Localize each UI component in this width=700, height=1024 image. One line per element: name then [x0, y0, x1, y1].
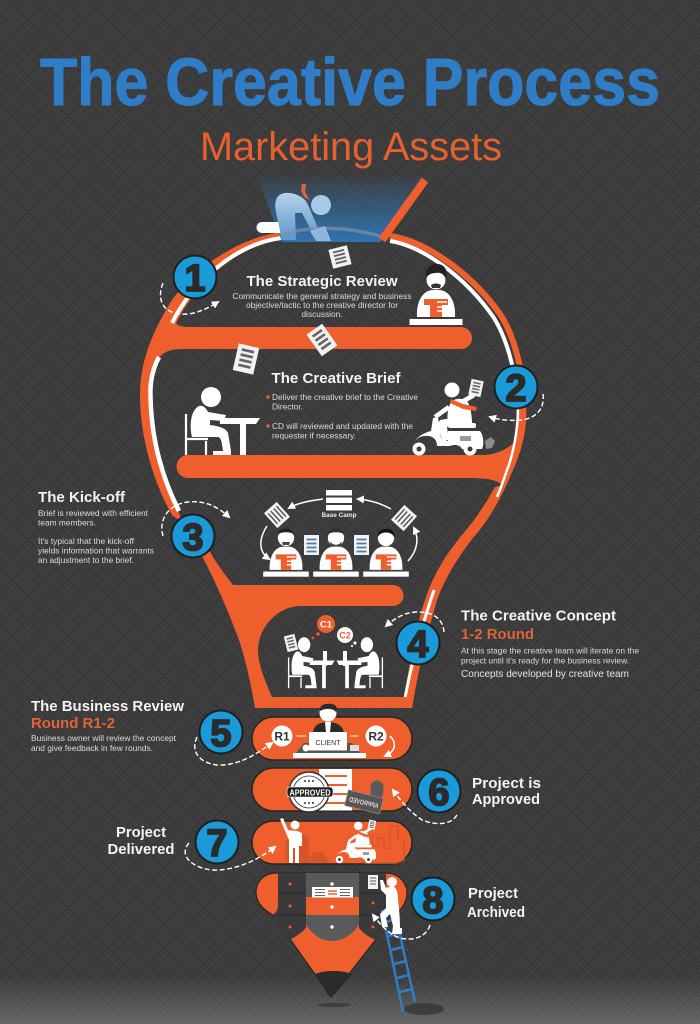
step badge 5 — [200, 710, 242, 755]
panel: strategic review text — [232, 273, 412, 319]
step badge 8 — [412, 878, 454, 922]
icon: client with laptop: CLIENT — [316, 740, 341, 747]
project archived label: Project — [468, 885, 518, 902]
light bulb outline — [140, 232, 526, 708]
document 2 — [233, 343, 259, 375]
icon: rubber stamp: APPROVED — [348, 796, 379, 810]
step badge 7 — [196, 820, 238, 865]
panel: creative brief text: CD will reviewed and updated with the — [272, 421, 413, 431]
arrow: step 8 — [373, 915, 430, 939]
spotlight beam — [257, 176, 427, 242]
R2 badge: R2 — [368, 730, 384, 744]
panel: creative concept text — [461, 608, 639, 680]
pencil eraser band: dark cabinet columns — [273, 873, 306, 941]
neck right white highlight — [405, 590, 434, 698]
icon: creative team — [263, 528, 409, 577]
lower left neck and third shelf — [180, 518, 414, 708]
upper right white highlight — [390, 241, 517, 392]
upper left white highlight — [172, 238, 281, 323]
panel: kick-off text: team members. — [38, 518, 96, 528]
approved seal: APPROVED — [290, 788, 331, 797]
approved seal — [287, 772, 333, 812]
panel: creative concept text: project until it's ready for the business review. — [461, 656, 629, 666]
arrow: step 3 — [162, 502, 229, 536]
R2 badge — [366, 726, 386, 746]
panel: business review text: Round R1-2 — [31, 715, 115, 732]
panel: creative brief text: Deliver the creative brief to the Creative — [272, 392, 418, 402]
icon: client with laptop — [293, 704, 366, 758]
panel: business review text: The Business Review — [31, 698, 184, 715]
step badge 6: 6 — [428, 772, 450, 814]
arrow: step 2 — [490, 394, 543, 420]
icon: base camp server — [322, 490, 357, 519]
project delivered label — [108, 824, 174, 858]
concept bubbles: C1 — [320, 620, 333, 630]
step badge 2 — [494, 366, 538, 410]
upper left glass and first shelf — [140, 232, 472, 523]
ladder shadow — [404, 1003, 444, 1015]
project is approved label: Approved — [472, 791, 540, 808]
panel: delivered pill — [252, 818, 412, 864]
icon: creatives at desks — [284, 634, 382, 688]
R1 badge: R1 — [274, 730, 290, 744]
step badge 2: 2 — [505, 368, 527, 410]
document on first shelf — [307, 324, 337, 356]
subtitle: Marketing Assets — [200, 125, 502, 169]
panel: approved pill — [252, 768, 412, 814]
drawer dividers — [278, 893, 392, 915]
panel: strategic review text: The Strategic Review — [246, 273, 398, 290]
filed documents — [312, 887, 353, 898]
panel: kick-off text: The Kick-off — [38, 489, 126, 506]
panel: business review text — [31, 698, 184, 753]
panel: kick-off text: It's typical that the kick-off — [38, 536, 135, 546]
connector dashes — [296, 735, 358, 737]
step badge 1 — [174, 256, 216, 300]
panel: creative brief text: The Creative Brief — [272, 370, 401, 387]
icon: person at desk — [186, 387, 260, 455]
panel: creative brief text — [266, 370, 418, 440]
pencil graphite tip — [315, 971, 352, 996]
step badge 3: 3 — [182, 517, 204, 559]
upper right glass — [390, 236, 524, 392]
panel: kick-off text: an adjustment to the brief. — [38, 555, 134, 565]
panel: strategic review text: objective/tactic to the creative director for — [246, 300, 398, 310]
panel: creative concept text: At this stage the creative team will iterate on the — [461, 646, 639, 656]
team workflow arrows — [261, 499, 417, 561]
icon: rubber stamp — [345, 780, 384, 814]
panel: archive pencil — [256, 873, 407, 997]
panel: strategic review text: discussion. — [302, 309, 342, 319]
arrow: step 5 — [195, 737, 272, 765]
panel: creative brief text: requester if necessary. — [272, 430, 356, 440]
panel: creative concept text: Concepts developed by creative team — [461, 669, 629, 680]
step badge 8: 8 — [422, 880, 444, 922]
icon: exhaust smoke — [485, 437, 495, 449]
arrow: step 7 — [185, 843, 275, 870]
arrow: step 6 — [393, 790, 457, 824]
panel: creative concept text: The Creative Concept — [461, 608, 616, 624]
icon: base camp server: Base Camp — [322, 512, 357, 519]
panel: business review text: Business owner will review the concept — [31, 733, 177, 743]
concept bubbles — [312, 615, 357, 647]
approved document — [319, 769, 352, 810]
city skyline shadow — [365, 826, 404, 863]
lower right white highlight — [497, 408, 518, 497]
arrow: step 1 — [160, 283, 218, 314]
R1 badge — [272, 726, 292, 746]
step badge 1: 1 — [184, 258, 206, 300]
icon: ladder — [382, 908, 415, 1012]
icon: archivist on ladder — [368, 875, 402, 934]
pencil shadow — [317, 1003, 351, 1007]
pencil body — [256, 873, 407, 997]
icon: creative director reading — [410, 264, 462, 325]
ground shadows — [285, 835, 330, 863]
icon: person dropping brief — [275, 184, 380, 241]
step badge 6 — [418, 770, 460, 814]
panel: business review pill — [252, 704, 412, 760]
white desk bar — [256, 222, 283, 233]
arrow: step 4 — [386, 612, 444, 632]
step badge 7: 7 — [206, 823, 228, 865]
cabinet drawer — [306, 897, 359, 915]
drawer knobs — [288, 882, 374, 929]
spotlight orange rod — [382, 180, 425, 240]
project delivered label: Project — [116, 824, 166, 841]
step badge 4: 4 — [407, 624, 429, 666]
R2 arrow — [385, 736, 394, 756]
panel: business review text: and give feedback in few rounds. — [31, 743, 153, 753]
panel: strategic review text: Communicate the general strategy and business — [232, 291, 412, 301]
panel: creative concept text: 1-2 Round — [461, 626, 534, 643]
step badge 5: 5 — [210, 713, 232, 755]
lower left white highlight — [150, 357, 179, 511]
project is approved label — [472, 775, 541, 808]
lower right glass and second shelf — [176, 405, 526, 708]
concept bubbles: C2 — [339, 630, 351, 640]
panel: kick-off text: Brief is reviewed with efficient — [38, 508, 149, 518]
step badge 4 — [396, 622, 440, 666]
icon: courier on scooter — [412, 379, 484, 456]
project delivered label: Delivered — [108, 841, 174, 858]
step badge 3 — [172, 514, 214, 559]
document 1 — [328, 245, 352, 269]
icon: recipient waving — [280, 818, 302, 863]
panel: kick-off text: yields information that warrants — [38, 546, 154, 556]
icon: courier on scooter — [336, 820, 376, 863]
project archived label: Archived — [467, 904, 525, 921]
project archived label — [467, 885, 525, 921]
project is approved label: Project is — [472, 775, 541, 792]
team documents — [264, 502, 417, 555]
panel: creative brief text: Director. — [272, 402, 303, 412]
panel: kick-off text — [38, 489, 154, 565]
